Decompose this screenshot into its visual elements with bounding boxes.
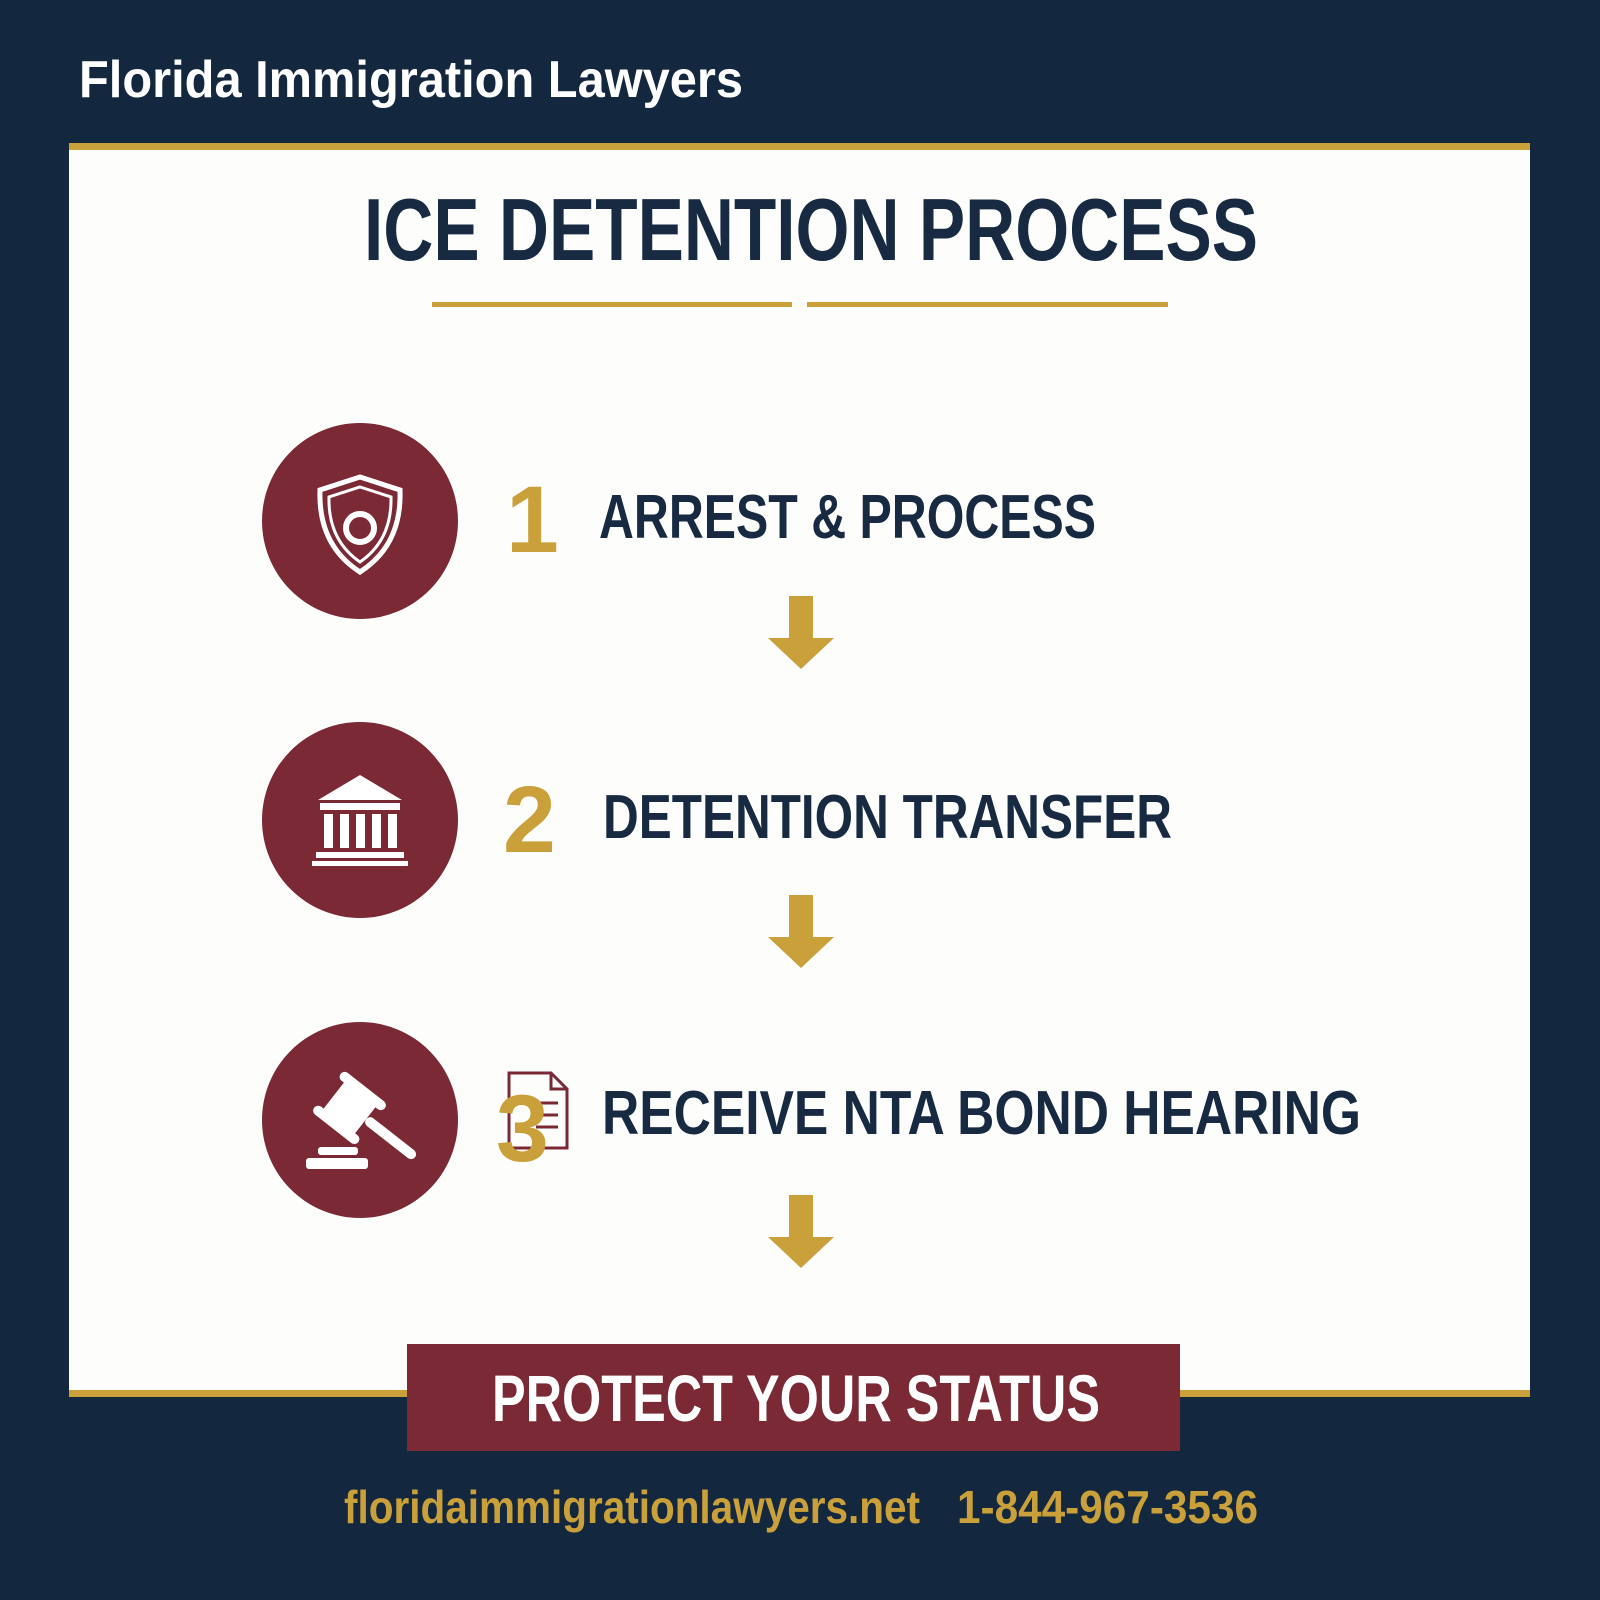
number 3: 3: [496, 1076, 549, 1182]
step 2: [262, 722, 1172, 918]
banner: protect your status: PROTECT YOUR STATUS: [492, 1361, 1100, 1435]
number 2: 2: [503, 767, 556, 873]
icon: badge: [262, 423, 458, 619]
panel: main white card: [69, 143, 1530, 1397]
number 1: 1: [506, 467, 559, 573]
icon: gavel: [262, 1022, 458, 1218]
icon: document: [509, 1073, 567, 1148]
label: arrest: ARREST & PROCESS: [599, 483, 1096, 552]
step 3: [262, 1022, 1361, 1218]
banner: protect your status: [407, 1344, 1180, 1451]
arrow 3: [768, 1195, 834, 1268]
title underline: [432, 302, 1168, 307]
title: ICE DETENTION PROCESS: [364, 180, 1258, 279]
header: firm name: Florida Immigration Lawyers: [79, 51, 743, 109]
arrow 1: [768, 596, 834, 669]
footer: website and phone: floridaimmigrationlawyers.net: [344, 1481, 920, 1533]
icon: courthouse: [262, 722, 458, 918]
step 1: [262, 423, 1096, 619]
label: detention transfer: DETENTION TRANSFER: [603, 783, 1172, 852]
label: receive nta bond hearing: RECEIVE NTA BOND HEARING: [602, 1079, 1361, 1148]
footer: website and phone: 1-844-967-3536: [957, 1481, 1258, 1533]
arrow 2: [768, 895, 834, 968]
